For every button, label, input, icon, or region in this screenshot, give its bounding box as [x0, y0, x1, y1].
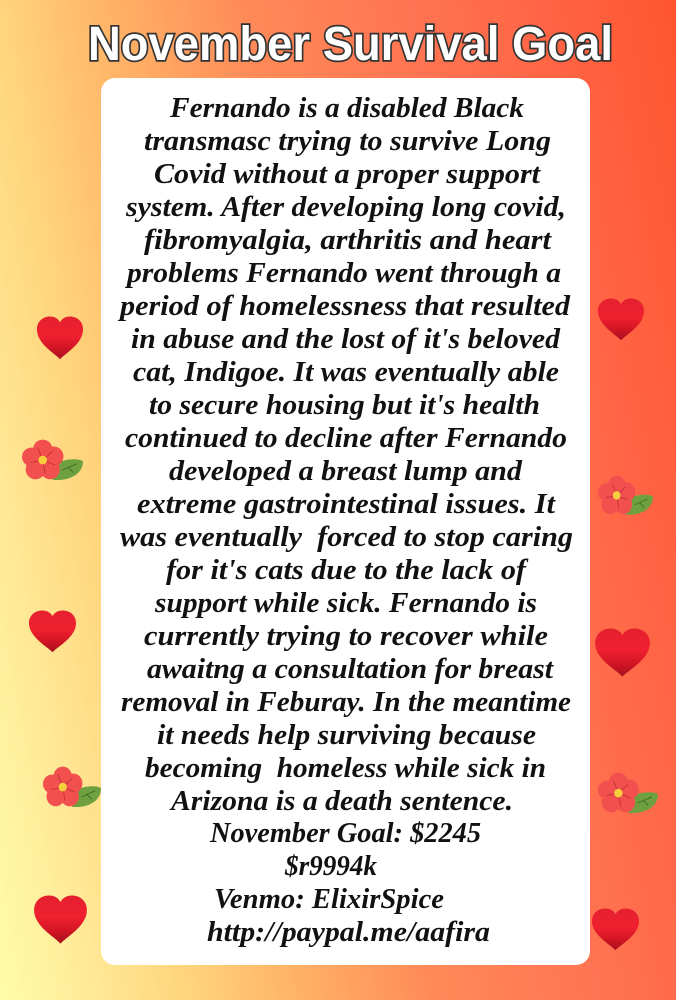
story paragraph: Arizona is a death sentence. — [169, 786, 513, 817]
icon: flower right 1 — [598, 476, 653, 515]
story paragraph: removal in Feburay. In the meantime — [121, 687, 571, 718]
icon: heart right 2 — [595, 629, 650, 677]
icon: flower left 2 — [43, 767, 101, 807]
story paragraph: transmasc trying to survive Long — [144, 126, 551, 157]
story paragraph — [117, 93, 573, 817]
story paragraph: system. After developing long covid, — [125, 192, 566, 223]
story paragraph: for it's cats due to the lack of — [166, 555, 529, 586]
story paragraph: awaitng a consultation for breast — [147, 654, 554, 685]
story paragraph: continued to decline after Fernando — [125, 423, 567, 454]
icon: heart left 2 — [29, 610, 76, 652]
venmo handle: Venmo: ElixirSpice — [214, 884, 444, 915]
icon: heart left 1 — [37, 316, 83, 359]
story paragraph: support while sick. Fernando is — [154, 588, 537, 619]
story paragraph: fibromyalgia, arthritis and heart — [144, 225, 552, 256]
story paragraph: becoming homeless while sick in — [145, 753, 546, 784]
panel background — [101, 78, 590, 965]
story paragraph: problems Fernando went through a — [124, 258, 561, 289]
goal amount: November Goal: $2245 — [209, 818, 481, 849]
icon: heart right 3 — [592, 908, 639, 950]
story paragraph: was eventually forced to stop caring — [120, 522, 573, 553]
story paragraph: developed a breast lump and — [169, 456, 523, 487]
story paragraph: it needs help surviving because — [157, 720, 536, 751]
paypal link: http://paypal.me/aafira — [207, 917, 490, 948]
story paragraph: Fernando is a disabled Black — [169, 93, 525, 124]
icon: heart left 3 — [34, 896, 87, 944]
story paragraph: period of homelessness that resulted — [117, 291, 571, 322]
story paragraph: in abuse and the lost of it's beloved — [131, 324, 561, 355]
title: November Survival Goal — [88, 18, 613, 71]
icon: flower left 1 — [22, 440, 83, 480]
story paragraph: to secure housing but it's health — [149, 390, 540, 421]
icon: flower right 2 — [598, 773, 658, 813]
story paragraph: extreme gastrointestinal issues. It — [137, 489, 556, 520]
story paragraph: cat, Indigoe. It was eventually able — [133, 357, 559, 388]
icon: heart right 1 — [598, 298, 644, 340]
cash app tag: $r9994k — [284, 851, 378, 882]
story paragraph: Covid without a proper support — [154, 159, 541, 190]
story paragraph: currently trying to recover while — [144, 621, 548, 652]
panel: story text — [101, 78, 590, 965]
